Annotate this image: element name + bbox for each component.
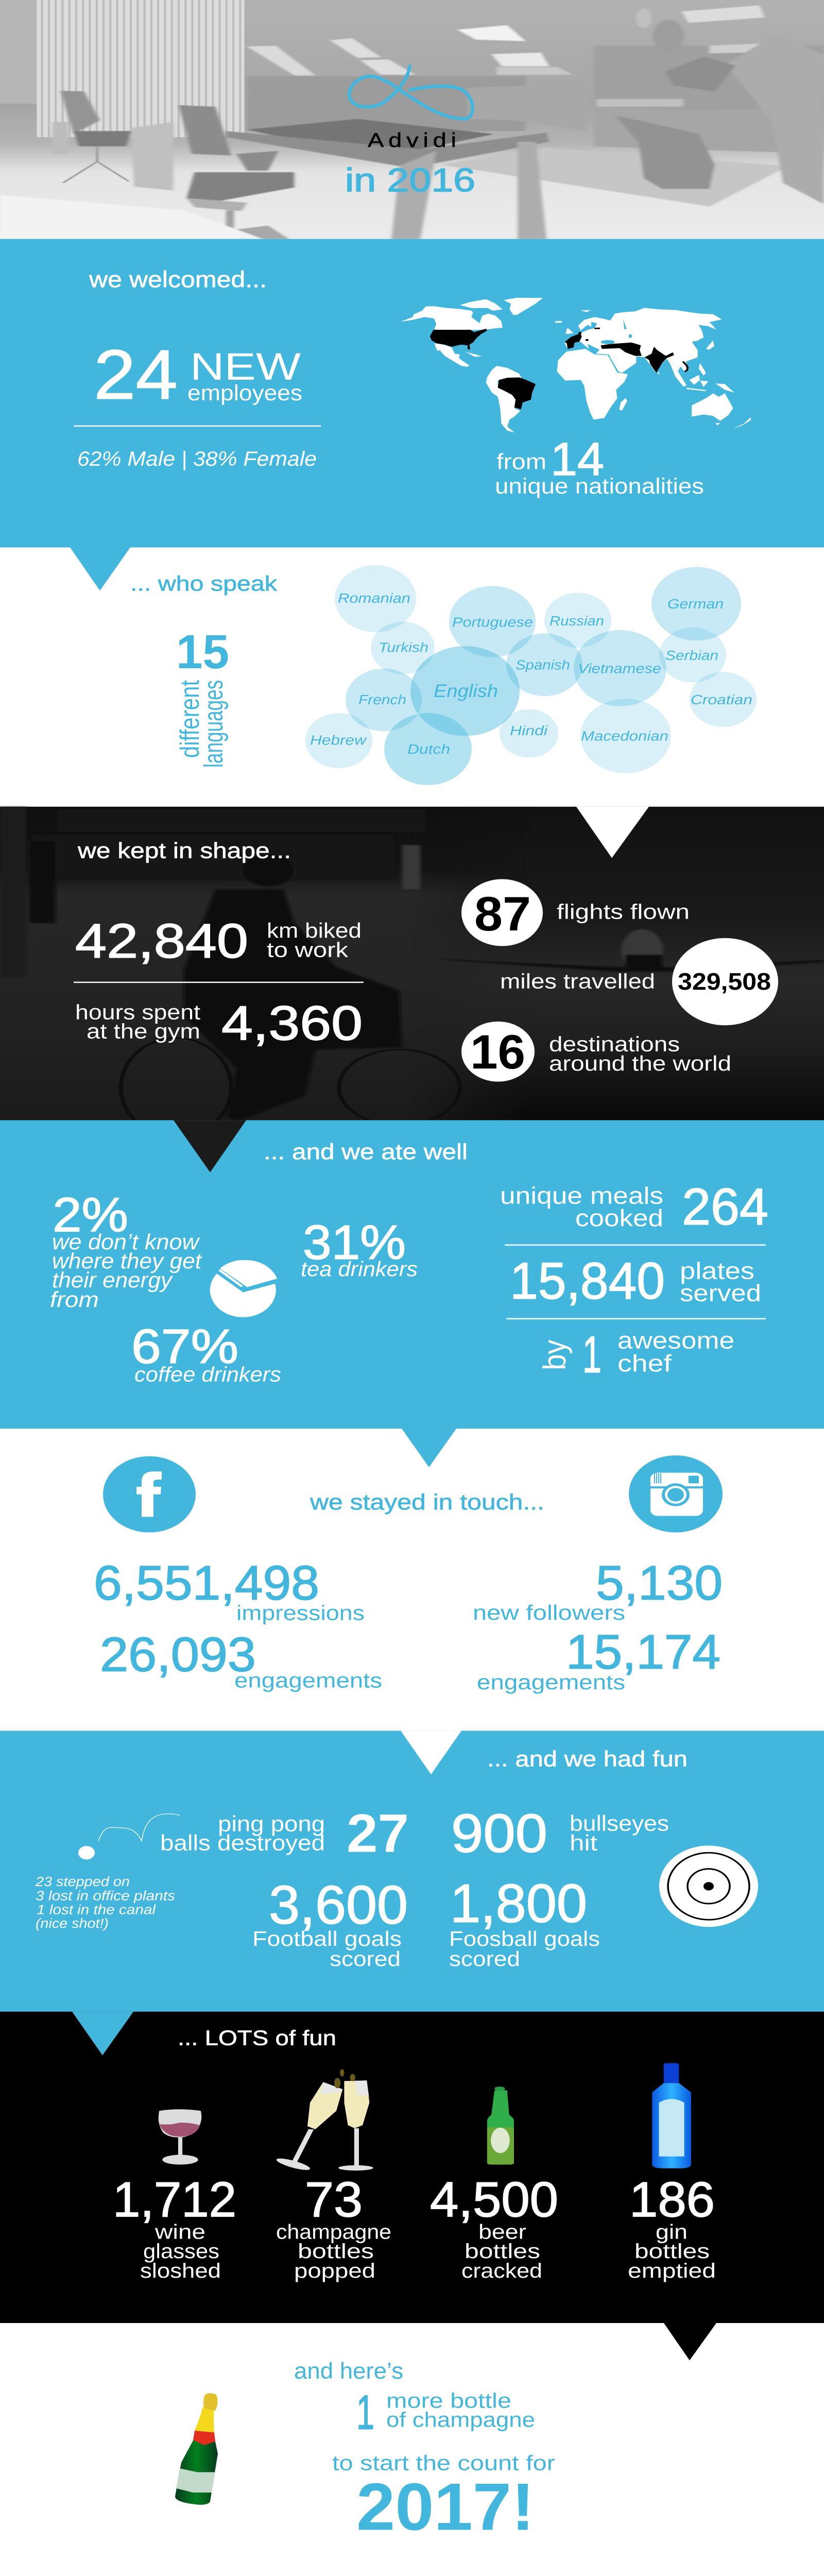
pie chart xyxy=(210,1260,277,1317)
stat: unique meals: 264 xyxy=(682,1178,768,1235)
bubble chart of languages: Portuguese xyxy=(452,615,533,630)
bubble chart of languages: Romanian xyxy=(338,591,410,606)
panel: we had fun xyxy=(0,1731,824,2012)
stat: unique meals: unique meals xyxy=(500,1182,663,1209)
cyclist and airplane photo background xyxy=(0,807,824,1137)
arrow notch xyxy=(401,1731,461,1774)
stat: awesome chef: by xyxy=(537,1340,573,1370)
stat: gym hours: at the gym xyxy=(87,1020,200,1043)
stat: gin bottles: gin xyxy=(656,2221,688,2243)
stat: champagne bottles: bottles xyxy=(298,2240,374,2263)
stat: football goals xyxy=(252,1874,408,1971)
big year: 2017! xyxy=(356,2469,535,2544)
icon: facebook xyxy=(103,1456,196,1533)
ping pong note xyxy=(35,1874,175,1931)
bubble chart of languages: Spanish xyxy=(516,657,570,673)
office photo background xyxy=(0,0,824,239)
closing text: to start the count for xyxy=(332,2451,555,2475)
stat: km biked: 42,840 xyxy=(75,914,248,968)
stat: football goals: Football goals xyxy=(252,1927,402,1951)
panel: we kept in shape xyxy=(0,807,824,1137)
ping pong note: 3 lost in office plants xyxy=(36,1888,175,1904)
stat: instagram followers: 5,130 xyxy=(596,1556,723,1610)
stat: flights: 87 xyxy=(474,887,531,941)
stat: tea: 31% xyxy=(303,1216,406,1269)
stat: facebook impressions: 6,551,498 xyxy=(94,1556,319,1610)
stat: bullseyes xyxy=(451,1803,669,1863)
arrow notch xyxy=(402,1429,456,1467)
stat: facebook engagements xyxy=(100,1628,382,1692)
stat: facebook impressions: impressions xyxy=(236,1601,365,1625)
stat: gym hours: 4,360 xyxy=(221,997,363,1050)
stat: football goals: scored xyxy=(330,1947,401,1971)
panel: languages xyxy=(0,547,824,807)
stat: wine glasses: glasses xyxy=(143,2240,219,2263)
stat: awesome chef xyxy=(537,1326,734,1383)
stat: foosball goals xyxy=(449,1873,600,1971)
stat: wine glasses: 1,712 xyxy=(113,2172,236,2227)
stat: new employees xyxy=(94,336,302,414)
bubble chart of languages xyxy=(305,565,757,785)
panel background xyxy=(0,2012,824,2323)
stat: beer bottles xyxy=(430,2172,558,2282)
stat: beer bottles: cracked xyxy=(461,2260,542,2282)
stat: destinations: 16 xyxy=(470,1025,525,1079)
stat: ping pong balls: ping pong xyxy=(218,1812,325,1836)
panel background xyxy=(0,1731,824,2012)
stat: plates served: served xyxy=(680,1280,761,1306)
rotated label: languages xyxy=(199,680,229,768)
bubble chart of languages: Dutch xyxy=(407,742,450,757)
bubble chart of languages: Turkish xyxy=(379,640,428,655)
stat: champagne bottles: champagne xyxy=(276,2221,391,2243)
stat: km biked: km biked xyxy=(267,919,362,942)
stat: wine glasses xyxy=(113,2172,236,2282)
stat: 2 percent: their energy xyxy=(52,1268,174,1293)
stat: 15: 15 xyxy=(176,624,229,679)
stat: wine glasses: sloshed xyxy=(140,2260,221,2282)
bubble chart of languages: Macedonian xyxy=(581,728,668,744)
arrow notch xyxy=(576,807,649,858)
stat: unique meals xyxy=(500,1178,768,1235)
stat: 2 percent: we don’t know xyxy=(52,1230,200,1255)
stat: wine glasses: wine xyxy=(154,2221,205,2243)
stat: tea: tea drinkers xyxy=(301,1257,418,1281)
stat: 2 percent: 2% xyxy=(53,1188,128,1242)
stat: facebook engagements: engagements xyxy=(234,1669,382,1692)
stat: bullseyes: bullseyes xyxy=(570,1811,669,1836)
stat: one more bottle: of champagne xyxy=(386,2408,535,2432)
stat: miles: 329,508 xyxy=(678,969,771,995)
stat: ping pong balls: 27 xyxy=(347,1803,409,1863)
stat: beer bottles: 4,500 xyxy=(430,2172,558,2227)
stat: foosball goals: Foosball goals xyxy=(449,1927,600,1951)
panel: we welcomed xyxy=(0,239,824,547)
stat: gin bottles: 186 xyxy=(629,2172,715,2227)
bubble chart of languages: French xyxy=(358,692,406,707)
stat: new employees: NEW xyxy=(190,345,301,388)
stat: instagram engagements xyxy=(477,1625,720,1694)
stat: awesome chef: chef xyxy=(617,1350,672,1377)
stat: new employees: employees xyxy=(187,381,302,405)
icon: target xyxy=(659,1845,758,1927)
panel: lots of fun xyxy=(0,2012,824,2323)
heading: ... who speak xyxy=(130,572,277,595)
panel: closing xyxy=(0,2323,824,2576)
stat: coffee xyxy=(131,1320,281,1386)
stat: 2 percent: from xyxy=(50,1287,99,1312)
bubble chart of languages: English xyxy=(434,681,498,701)
stat: miles xyxy=(500,938,778,1025)
stat: ping pong balls: balls destroyed xyxy=(160,1831,325,1855)
heading: ... LOTS of fun xyxy=(178,2026,336,2050)
bubble chart of languages: Vietnamese xyxy=(578,661,661,676)
stat: unique meals: cooked xyxy=(575,1205,663,1231)
stat: gin bottles: emptied xyxy=(628,2260,716,2282)
stat: foosball goals: scored xyxy=(449,1947,520,1971)
stat: nationalities: from xyxy=(496,450,546,474)
stat: ping pong balls xyxy=(160,1803,409,1863)
stat: instagram engagements: engagements xyxy=(477,1670,625,1694)
panel: stayed in touch xyxy=(0,1429,824,1731)
icon: bouncing ball xyxy=(78,1814,180,1859)
panel background xyxy=(0,547,824,807)
stat: coffee: 67% xyxy=(131,1320,238,1374)
stat: beer bottles: bottles xyxy=(465,2240,540,2263)
stat: one more bottle xyxy=(356,2386,535,2439)
stat: instagram engagements: 15,174 xyxy=(566,1625,720,1679)
heading: ... and we ate well xyxy=(264,1140,468,1164)
stat: champagne bottles: 73 xyxy=(305,2172,363,2227)
heading: we stayed in touch... xyxy=(310,1490,544,1515)
panel: header photo with logo xyxy=(0,0,824,239)
lead text: and here’s xyxy=(294,2358,403,2384)
panel: we ate well xyxy=(0,1120,824,1429)
logo wordmark: Advidi xyxy=(368,129,456,151)
stat: foosball goals: 1,800 xyxy=(450,1873,587,1934)
icon: wine glass xyxy=(159,2109,201,2165)
stat: one more bottle: 1 xyxy=(356,2386,374,2439)
bubble chart of languages: Hindi xyxy=(510,723,548,738)
stat: flights: flights flown xyxy=(557,900,690,924)
stat: bullseyes: 900 xyxy=(451,1803,547,1863)
stat: nationalities: 14 xyxy=(551,433,604,485)
stat: nationalities xyxy=(495,433,704,499)
panel background xyxy=(0,1429,824,1731)
bubble chart of languages: Serbian xyxy=(665,648,718,664)
panel background xyxy=(0,239,824,547)
title year: in 2016 xyxy=(345,162,475,199)
stat: miles: miles travelled xyxy=(500,970,655,993)
stat: plates served: 15,840 xyxy=(510,1252,665,1310)
stat: awesome chef: 1 xyxy=(582,1326,602,1383)
logo symbol xyxy=(349,66,473,119)
gender split: 62% Male | 38% Female xyxy=(77,448,317,470)
icon: champagne flutes xyxy=(272,2069,373,2172)
icon: instagram xyxy=(629,1455,723,1533)
stat: destinations: around the world xyxy=(549,1052,731,1075)
stat: new employees: 24 xyxy=(94,336,178,414)
bubble chart of languages: German xyxy=(667,597,724,612)
stat: champagne bottles xyxy=(276,2172,391,2282)
bubble chart of languages: Hebrew xyxy=(310,733,367,748)
stat: gin bottles xyxy=(628,2172,716,2282)
heading: ... and we had fun xyxy=(487,1747,688,1771)
ping pong note: (nice shot!) xyxy=(36,1916,109,1931)
stat: instagram followers xyxy=(473,1556,723,1624)
icon: champagne bottle xyxy=(175,2393,218,2505)
stat: instagram followers: new followers xyxy=(473,1601,625,1624)
stat: flights xyxy=(461,879,690,946)
stat: coffee: coffee drinkers xyxy=(134,1363,281,1386)
heading: we welcomed... xyxy=(89,267,267,292)
stat: facebook engagements: 26,093 xyxy=(100,1628,256,1682)
rotated label xyxy=(175,680,229,768)
stat: bullseyes: hit xyxy=(570,1831,597,1855)
panel background xyxy=(0,2323,824,2576)
ping pong note: 23 stepped on xyxy=(35,1874,130,1889)
heading: we kept in shape... xyxy=(77,839,291,863)
stat: destinations xyxy=(461,1022,731,1082)
ping pong note: 1 lost in the canal xyxy=(37,1902,157,1918)
panel background xyxy=(0,1120,824,1429)
bubble chart of languages: Russian xyxy=(550,613,604,629)
stat: champagne bottles: popped xyxy=(294,2260,375,2282)
stat: 2 percent: where they get xyxy=(52,1249,202,1274)
icon: gin bottle xyxy=(652,2063,691,2168)
arrow notch xyxy=(174,1120,246,1172)
arrow notch xyxy=(664,2323,716,2360)
bubble chart of languages: Croatian xyxy=(691,692,752,707)
stat: beer bottles: beer xyxy=(478,2221,526,2243)
stat: gym hours: hours spent xyxy=(75,1001,200,1024)
rotated label: different xyxy=(175,680,205,758)
stat: 2 percent xyxy=(50,1188,202,1312)
stat: nationalities: unique nationalities xyxy=(495,474,704,499)
stat: awesome chef: awesome xyxy=(617,1327,734,1353)
stat: km biked: to work xyxy=(267,938,348,962)
stat: football goals: 3,600 xyxy=(269,1874,408,1935)
arrow notch xyxy=(70,547,130,590)
stat: plates served: plates xyxy=(680,1258,754,1284)
stat: destinations: destinations xyxy=(549,1032,680,1056)
stat: one more bottle: more bottle xyxy=(386,2389,511,2413)
world map xyxy=(401,298,751,432)
arrow notch xyxy=(72,2012,133,2055)
stat: gin bottles: bottles xyxy=(634,2240,710,2263)
icon: beer bottle xyxy=(487,2087,514,2165)
stat: gym hours xyxy=(75,997,363,1050)
icon: drinks illustrations xyxy=(159,2063,691,2172)
stat: km biked xyxy=(75,914,362,968)
